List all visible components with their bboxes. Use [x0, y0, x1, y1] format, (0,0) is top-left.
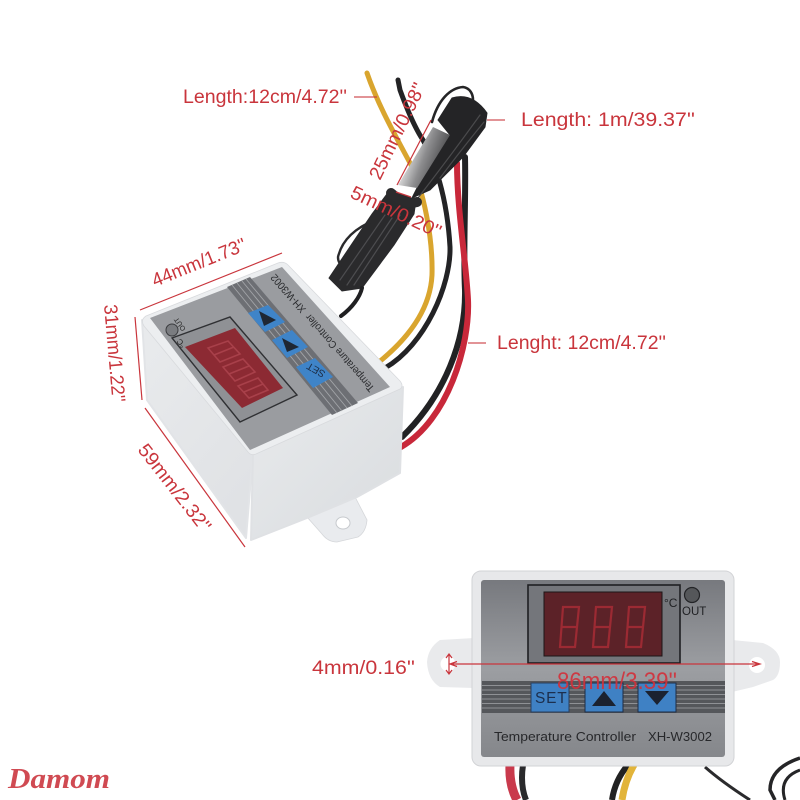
- yellow wire: [367, 73, 432, 362]
- upper sensor coil: [412, 97, 487, 198]
- controller: front view: [427, 571, 800, 800]
- temperature probe: [398, 127, 450, 188]
- dimension: mounting hole span: 86mm/3.39'': [557, 668, 677, 695]
- striped button band: [482, 681, 725, 713]
- dimension: height of angled body: [99, 304, 142, 403]
- degree C label: °C: [664, 596, 678, 610]
- dimension: power wire length: Lenght: 12cm/4.72'': [497, 333, 666, 354]
- display window frame: [172, 317, 297, 422]
- mounting tab: [307, 493, 367, 542]
- model number: XH-W3002: [648, 729, 712, 744]
- up button: [585, 683, 623, 712]
- grey face: [481, 580, 725, 757]
- left hole: [440, 656, 456, 672]
- model text on angled face: Temperature Controller XH-W3002: [268, 271, 377, 394]
- dimension: hole diameter: 4mm/0.16'': [312, 658, 415, 679]
- black wire: [385, 80, 450, 368]
- housing sides: [142, 320, 253, 538]
- up button: [248, 305, 285, 332]
- grey face plate: [150, 267, 390, 450]
- housing top rim: [142, 262, 402, 455]
- SET button: [296, 358, 333, 388]
- SET button: [531, 683, 569, 712]
- digits: [560, 607, 645, 647]
- SET button: SET: [535, 690, 568, 707]
- display frame: [528, 585, 680, 663]
- black power wire: [402, 157, 465, 437]
- right mounting tab: [732, 640, 780, 692]
- dimension: depth of angled body: [133, 408, 245, 547]
- left mounting tab: [427, 638, 474, 688]
- dimension: depth of angled body: 59mm/2.32'': [133, 440, 215, 537]
- degree label: °C: [175, 337, 188, 349]
- dimension: probe diameter: 5mm/0.20'': [347, 182, 445, 243]
- OUT label: OUT: [682, 606, 706, 618]
- right hole: [749, 657, 765, 673]
- lower sensor coil: [329, 190, 416, 291]
- OUT label: OUT: [173, 315, 188, 332]
- LED indicator: [166, 324, 178, 336]
- red display: [544, 592, 662, 656]
- thin loop above coil: [432, 87, 473, 122]
- dimension: width of angled body: [140, 235, 282, 310]
- dimension: hole diameter: [312, 654, 452, 679]
- dimension: height of angled body: 31mm/1.22'': [99, 304, 128, 403]
- dimension: probe length: 25mm/0.98'': [366, 80, 431, 183]
- red display: [185, 328, 283, 408]
- display digits: [208, 341, 268, 398]
- sensor ring: [391, 193, 417, 203]
- sensor lead to body: [341, 288, 362, 316]
- dimension: mounting hole span: [449, 662, 760, 695]
- tab hole: [336, 517, 350, 529]
- bottom wires: [510, 758, 800, 800]
- red power wire: [401, 163, 468, 447]
- SET button: SET: [305, 360, 328, 379]
- watermark: Damom: [7, 764, 110, 795]
- controller: angled view: [142, 262, 403, 542]
- dimension: sensor cable length: Length: 1m/39.37'': [521, 110, 695, 131]
- LED: [684, 588, 700, 602]
- thin loop left of coil: [338, 220, 375, 266]
- down button: [272, 330, 308, 358]
- product name: Temperature Controller: [494, 729, 637, 744]
- dimension: yellow wire length: Length:12cm/4.72'': [183, 87, 347, 108]
- wires and sensor cable: [329, 73, 487, 447]
- dimension: width of angled body: 44mm/1.73'': [149, 235, 250, 292]
- white housing: [472, 571, 734, 766]
- down button: [638, 683, 676, 712]
- striped band: [227, 277, 358, 415]
